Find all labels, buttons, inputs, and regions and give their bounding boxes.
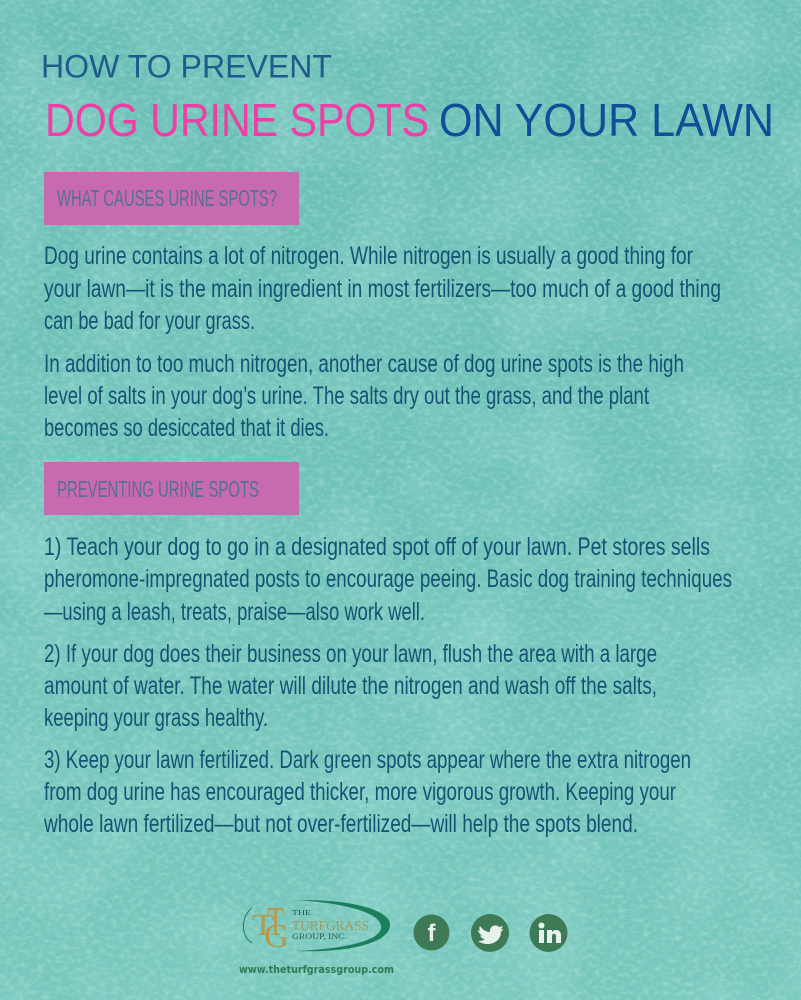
title: ON YOUR LAWN	[439, 94, 774, 146]
logo: The Turfgrass Group: THE	[292, 908, 312, 917]
website url: www.theturfgrassgroup.com	[239, 964, 394, 976]
text block: prevention steps: —using a leash, treats, praise—also work well.	[44, 598, 425, 626]
logo: The Turfgrass Group: GROUP, INC.	[292, 931, 347, 941]
icon: twitter	[471, 914, 509, 952]
title: HOW TO PREVENT	[41, 48, 332, 84]
icon: facebook	[414, 914, 450, 950]
icon: facebook: f	[428, 920, 436, 947]
heading: what causes urine spots	[44, 172, 299, 225]
title: DOG URINE SPOTS	[45, 94, 429, 146]
heading: what causes urine spots: WHAT CAUSES URINE SPOTS?	[57, 185, 277, 211]
logo: The Turfgrass Group: TURFGRASS	[292, 919, 369, 934]
text block: prevention steps	[43, 533, 732, 838]
icon: linkedin	[530, 914, 568, 952]
logo: The Turfgrass Group: T	[252, 907, 274, 942]
heading: preventing urine spots: PREVENTING URINE SPOTS	[57, 476, 259, 502]
heading: preventing urine spots	[44, 462, 299, 515]
text block: causes: can be bad for your grass.	[44, 307, 255, 335]
logo: The Turfgrass Group	[243, 898, 390, 955]
logo: The Turfgrass Group: G	[264, 918, 289, 955]
text block: causes	[44, 242, 721, 442]
text block: causes: becomes so desiccated that it dies.	[44, 414, 329, 442]
title	[41, 48, 774, 146]
logo: The Turfgrass Group: T	[267, 898, 284, 944]
text block: prevention steps: whole lawn fertilized—but not over-fertilized—will help the spots blend.	[43, 810, 638, 838]
text block: prevention steps: keeping your grass healthy.	[44, 704, 268, 732]
